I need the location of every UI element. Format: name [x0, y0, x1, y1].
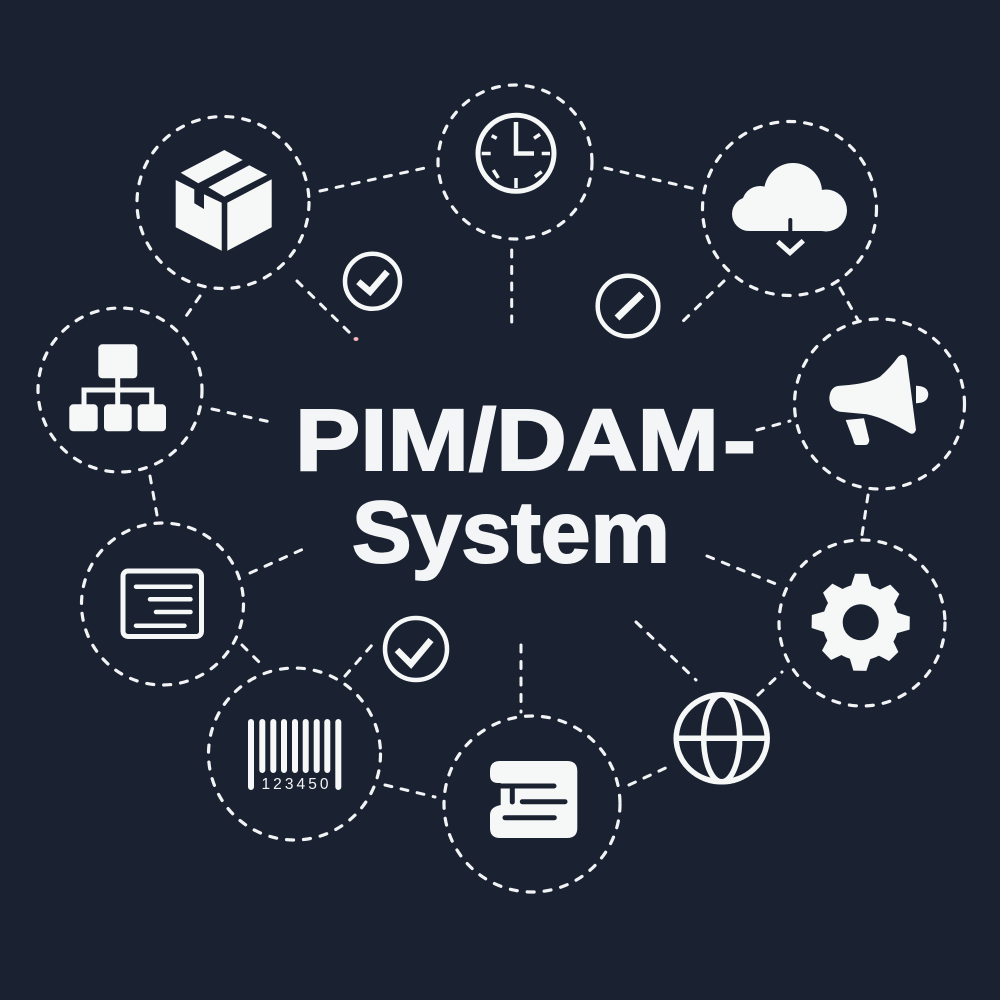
icon: globe	[676, 695, 768, 782]
icon: barcode: 123450	[262, 776, 329, 793]
icon: clock	[478, 115, 554, 191]
node: megaphone	[794, 319, 964, 489]
icon: org chart	[69, 344, 166, 431]
title	[295, 392, 756, 581]
node: gear	[779, 540, 945, 706]
badge: check bottom	[385, 618, 447, 680]
node: card	[444, 716, 620, 892]
icon: cloud download	[732, 163, 847, 253]
dashed connectors	[150, 168, 868, 797]
node: cloud	[702, 122, 876, 296]
icon: megaphone	[829, 355, 928, 445]
badge: check top	[345, 254, 400, 309]
icon: gear	[812, 574, 910, 671]
icon: barcode	[251, 722, 338, 793]
node: clock	[438, 85, 592, 239]
icon: package box	[176, 150, 272, 251]
icon: content card	[490, 761, 577, 838]
title: -	[723, 392, 756, 489]
title: PIM/DAM	[295, 392, 719, 489]
node: barcode	[208, 668, 380, 840]
icon: text window	[123, 571, 202, 636]
node: hierarchy	[38, 308, 202, 472]
title: System	[352, 484, 670, 581]
node: document window	[82, 523, 244, 685]
node: box	[137, 116, 309, 288]
pink connector tip	[354, 337, 358, 341]
badge: slash	[598, 276, 658, 336]
